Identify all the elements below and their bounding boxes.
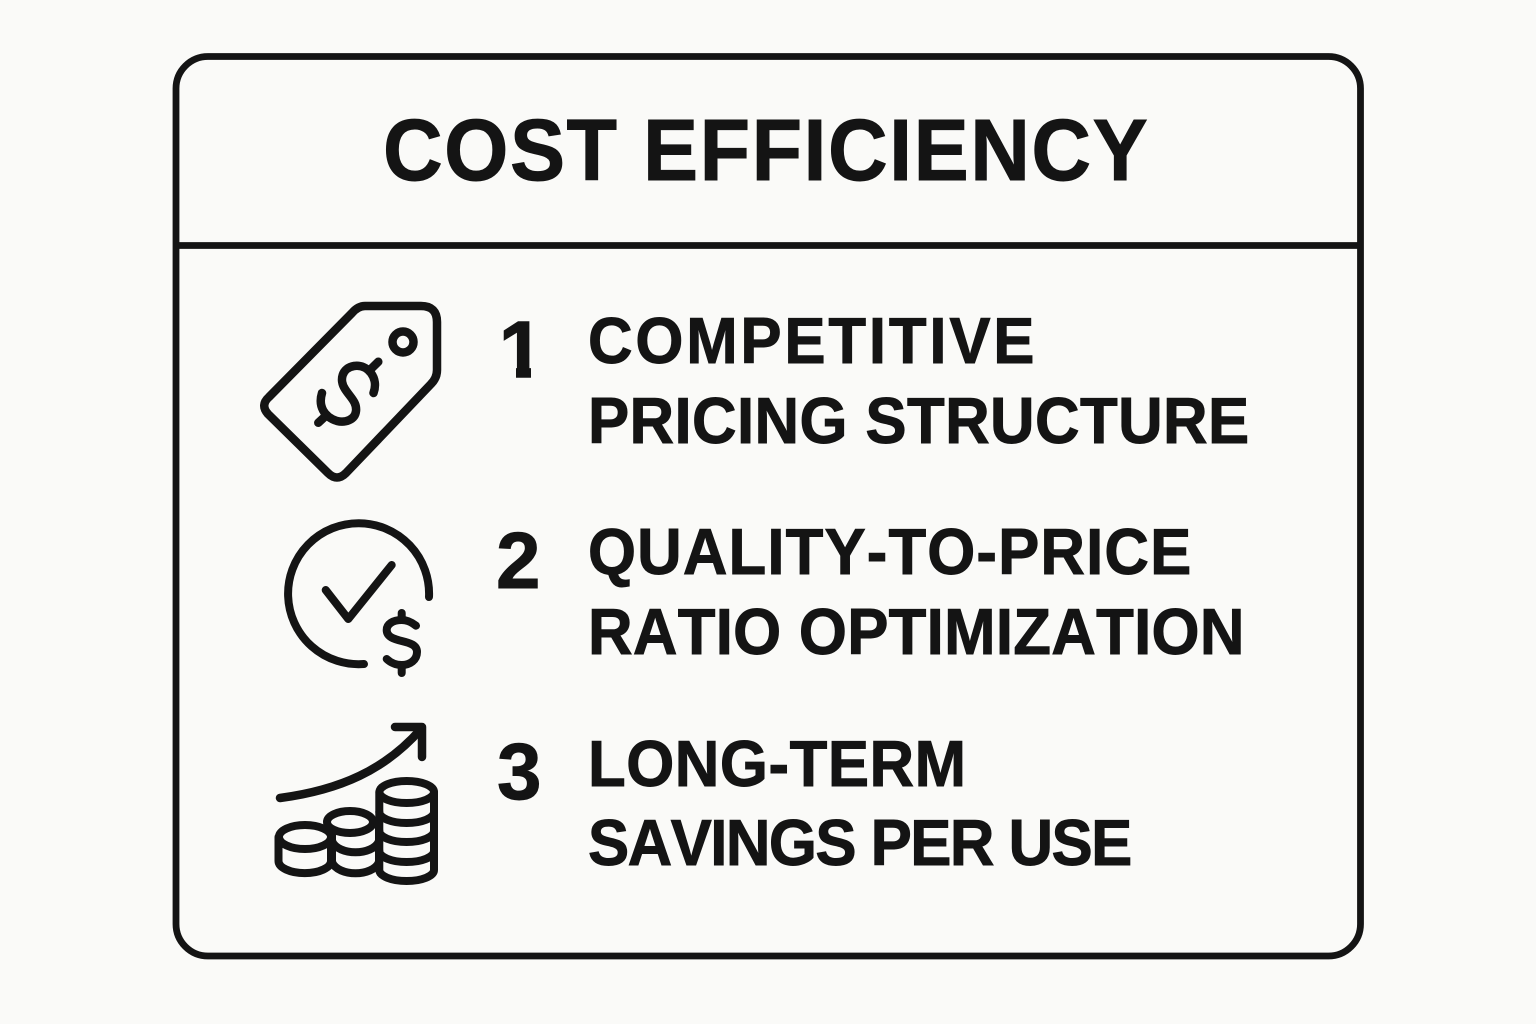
text: quality-to-price ratio optimization: RATIO OPTIMIZATION: [588, 597, 1244, 668]
icon: circular check with dollar sign: [288, 523, 429, 673]
item 2: quality-to-price ratio optimization: [288, 516, 1244, 673]
text: long-term savings per use: LONG-TERM: [588, 729, 966, 800]
text: competitive pricing structure: COMPETITIVE: [588, 306, 1035, 377]
text: quality-to-price ratio optimization: QUALITY-TO-PRICE: [588, 517, 1191, 588]
card frame: [176, 56, 1360, 956]
title: COST EFFICIENCY: [383, 101, 1148, 198]
item 3: long-term savings per use: [278, 727, 1132, 881]
text: long-term savings per use: [588, 729, 1132, 879]
text: long-term savings per use: SAVINGS PER USE: [588, 808, 1132, 879]
text: competitive pricing structure: PRICING STRUCTURE: [588, 386, 1249, 457]
icon: rising arrow over coin stacks: [278, 727, 434, 881]
text: quality-to-price ratio optimization: [588, 517, 1244, 668]
number 3: 3: [497, 727, 542, 816]
number 2: 2: [496, 516, 540, 605]
item 1: competitive pricing structure: [264, 305, 1249, 478]
icon: price tag with dollar sign: [264, 306, 437, 478]
number 1: 1: [499, 305, 544, 394]
text: competitive pricing structure: [588, 306, 1249, 457]
